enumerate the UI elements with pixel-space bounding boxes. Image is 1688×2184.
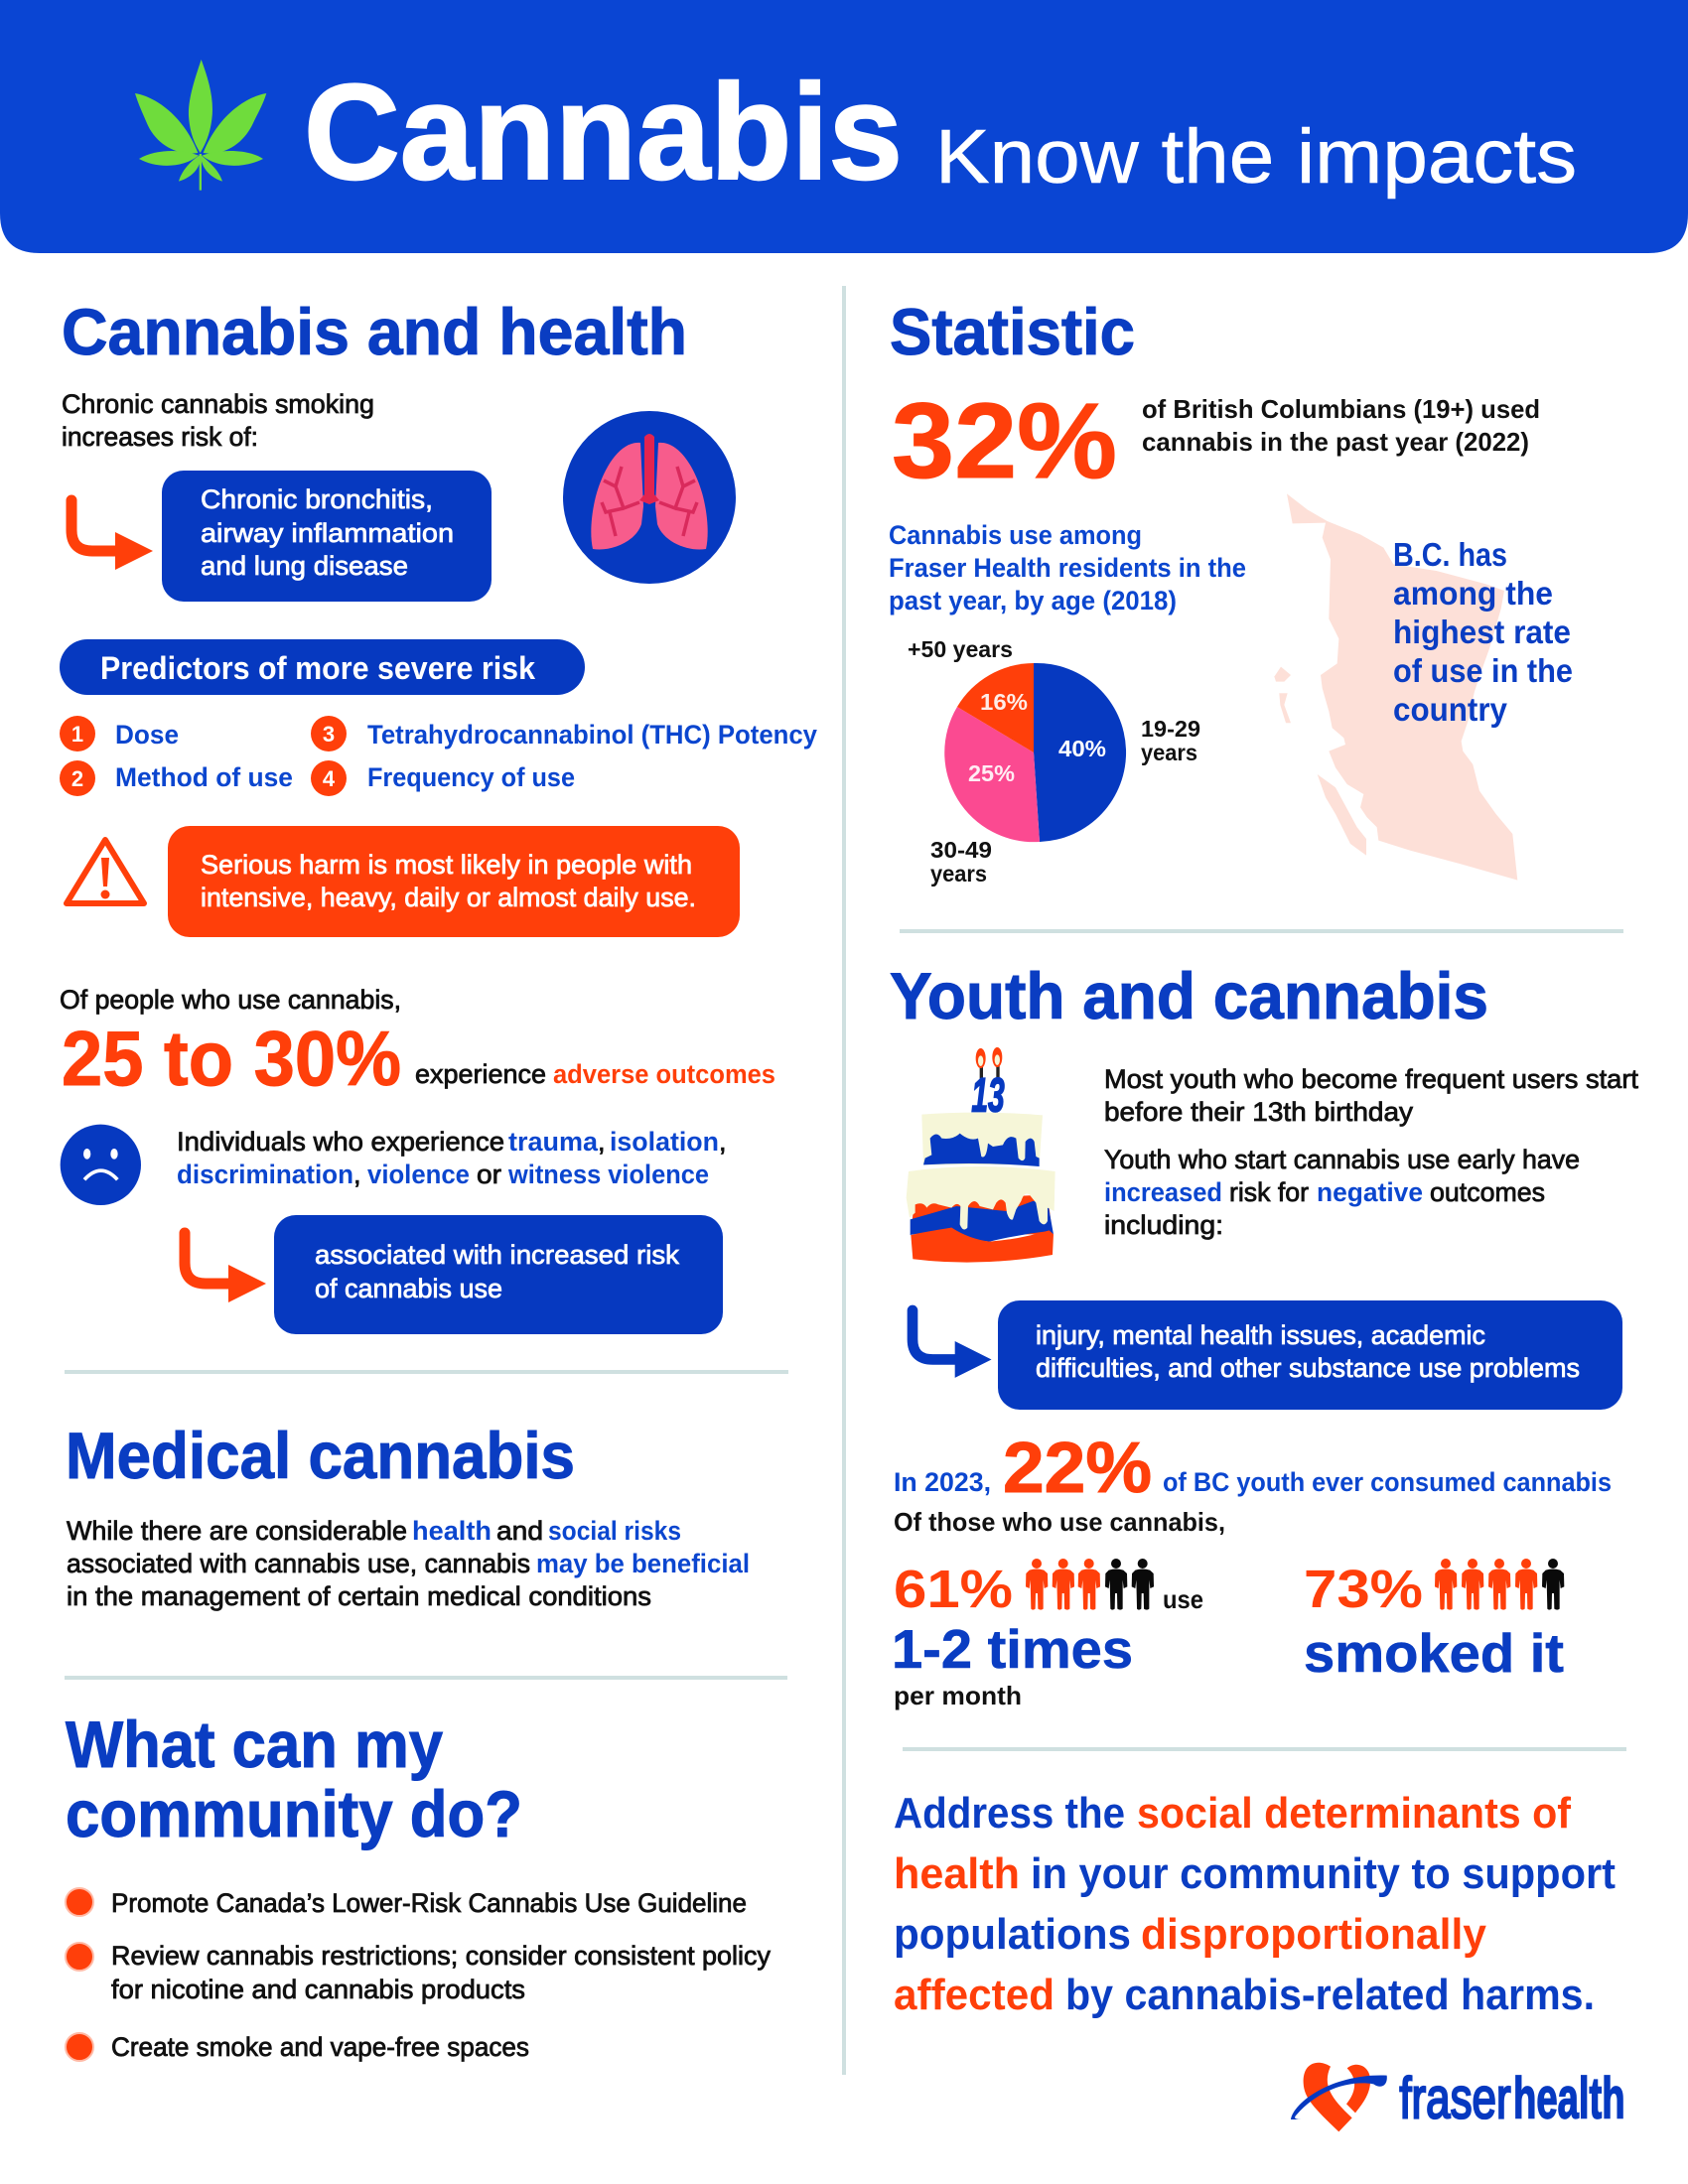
pie chart: use by age: 40% <box>1058 736 1106 761</box>
icon: people 3 of 5 <box>1026 1559 1154 1610</box>
text: medical cannabis body: health <box>412 1516 492 1546</box>
call to action: affected <box>894 1971 1055 2019</box>
text: risk factors: violence <box>367 1160 470 1189</box>
callout: negative outcomes: difficulties, and other substance use problems <box>1036 1353 1580 1383</box>
title: Cannabis <box>304 57 903 208</box>
call to action <box>894 1789 1616 2019</box>
list: predictors: 3 <box>323 722 335 747</box>
text: bc highest rate: highest rate <box>1393 614 1571 650</box>
subtitle: Know the impacts <box>935 114 1577 200</box>
text: youth early use: risk for <box>1229 1177 1309 1207</box>
text: bc highest rate: country <box>1393 691 1508 728</box>
text: british columbians: of British Columbians (19+) used <box>1142 394 1540 424</box>
text: medical cannabis body: and <box>496 1516 543 1546</box>
list: community actions <box>66 1888 771 2062</box>
callout: lung conditions: Chronic bronchitis, <box>201 484 433 514</box>
text: youth early use <box>1104 1064 1638 1240</box>
callout: lung conditions: and lung disease <box>201 551 408 581</box>
call to action: social determinants of <box>1137 1789 1571 1838</box>
pie chart: use by age: +50 years <box>908 636 1013 662</box>
icon: warning triangle <box>67 840 144 903</box>
text: adverse outcomes: experience <box>415 1059 546 1089</box>
text: chronic smoking: increases risk of: <box>62 422 258 452</box>
text: youth early use: Most youth who become frequent users start <box>1104 1064 1638 1094</box>
text: medical cannabis body: in the management of certain medical conditions <box>67 1581 651 1611</box>
heading: what can my community do <box>66 1707 522 1850</box>
call to action: Address the <box>894 1789 1125 1838</box>
list: predictors: Frequency of use <box>367 762 575 792</box>
text: youth early use: before their 13th birthday <box>1104 1097 1414 1127</box>
text: british columbians <box>1142 394 1540 457</box>
pill: predictors heading <box>60 639 585 695</box>
text: bc highest rate <box>1393 536 1573 728</box>
text: fraser health use <box>889 520 1246 615</box>
callout: lung conditions: airway inflammation <box>201 518 454 548</box>
stat: 61 percent: per month <box>894 1681 1022 1710</box>
list: community actions: Create smoke and vape-free spaces <box>111 2032 529 2062</box>
call to action: disproportionally <box>1141 1910 1487 1959</box>
stat: 61 percent <box>892 1559 1203 1710</box>
text: youth early use: outcomes <box>1430 1177 1545 1207</box>
text: risk factors: or <box>477 1160 501 1189</box>
panel: statistic <box>889 295 1573 887</box>
arrow: orange <box>71 500 153 570</box>
text: british columbians: cannabis in the past year (2022) <box>1142 427 1529 457</box>
header banner <box>0 0 1688 253</box>
stat: 22 percent of youth <box>894 1429 1612 1508</box>
panel: what can my community do <box>66 1707 771 2062</box>
text: bc highest rate: B.C. has <box>1393 536 1507 573</box>
text: risk factors: isolation <box>610 1127 719 1157</box>
call to action: populations <box>894 1910 1131 1959</box>
text: risk factors: , <box>598 1127 606 1157</box>
icon: sad face <box>61 1125 141 1205</box>
callout: serious harm <box>168 826 740 937</box>
list: predictors: Tetrahydrocannabinol (THC) Potency <box>367 720 817 750</box>
text: youth early use: Youth who start cannabis use early have <box>1104 1145 1580 1174</box>
heading: what can my community do: What can my <box>66 1707 443 1781</box>
stat: 22 percent of youth: 22% <box>1003 1429 1152 1508</box>
list: community actions: Promote Canada’s Lower-Risk Cannabis Use Guideline <box>111 1888 747 1918</box>
text: medical cannabis body: While there are considerable <box>67 1516 407 1546</box>
text: bc highest rate: among the <box>1393 575 1553 612</box>
list: predictors: 4 <box>323 766 336 791</box>
text: chronic smoking <box>62 389 374 452</box>
heading: what can my community do: community do? <box>66 1777 522 1850</box>
text: youth early use: increased <box>1104 1177 1222 1207</box>
text: risk factors <box>177 1127 727 1189</box>
text: risk factors: trauma <box>508 1127 599 1157</box>
text: risk factors: , <box>719 1127 727 1157</box>
text: youth early use: including: <box>1104 1210 1223 1240</box>
stat: 32 percent: 32% <box>892 380 1117 500</box>
text: medical cannabis body: may be beneficial <box>536 1549 750 1578</box>
list: predictors: Method of use <box>115 762 293 792</box>
text: youth early use: negative <box>1317 1177 1423 1207</box>
text: risk factors: witness violence <box>507 1160 709 1189</box>
heading: cannabis and health: Cannabis and health <box>62 295 687 368</box>
pie chart: use by age: 16% <box>980 689 1028 715</box>
list: predictors: Dose <box>115 720 179 750</box>
pie chart: use by age: 19-29 <box>1141 716 1200 742</box>
heading: medical cannabis: Medical cannabis <box>66 1419 575 1492</box>
callout: serious harm: Serious harm is most likely in people with <box>201 850 692 880</box>
map: british columbia <box>1274 493 1517 881</box>
logo: fraser health <box>1291 2063 1625 2131</box>
logo: fraser health: health <box>1513 2066 1625 2130</box>
pie chart: use by age: years <box>1141 740 1197 765</box>
callout: serious harm: intensive, heavy, daily or almost daily use. <box>201 883 696 912</box>
text: medical cannabis body: associated with cannabis use, cannabis <box>67 1549 530 1578</box>
text: adverse outcomes <box>415 1059 775 1089</box>
stat: 22 percent of youth: of BC youth ever consumed cannabis <box>1163 1467 1612 1497</box>
pie chart: use by age: 30-49 <box>930 837 992 863</box>
center column divider <box>842 286 846 2075</box>
text: medical cannabis body: social risks <box>548 1516 681 1546</box>
stat: 61 percent: 1-2 times <box>892 1618 1133 1680</box>
panel: youth and cannabis <box>890 959 1638 1710</box>
text: chronic smoking: Chronic cannabis smoking <box>62 389 374 419</box>
heading: youth and cannabis: Youth and cannabis <box>890 959 1488 1032</box>
icon: lungs <box>563 411 736 584</box>
logo: fraser health: fraser <box>1399 2066 1511 2130</box>
text: bc highest rate: of use in the <box>1393 652 1573 689</box>
arrow: orange <box>185 1233 266 1302</box>
text: risk factors: Individuals who experience <box>177 1127 504 1157</box>
pie chart: use by age: years <box>930 861 987 887</box>
list: community actions: Review cannabis restrictions; consider consistent policy <box>111 1941 771 1971</box>
list: predictors <box>60 716 817 796</box>
heading: statistic: Statistic <box>890 295 1135 368</box>
call to action: by cannabis-related harms. <box>1065 1971 1595 2019</box>
text: of people who use cannabis: Of people who use cannabis, <box>60 985 401 1015</box>
list: predictors: 2 <box>71 766 83 791</box>
icon: birthday cake: 13 <box>971 1068 1005 1122</box>
callout: negative outcomes: injury, mental health issues, academic <box>1036 1320 1485 1350</box>
stat: 73 percent: smoked it <box>1304 1622 1564 1684</box>
text: risk factors: , <box>353 1160 361 1189</box>
call to action: health <box>894 1849 1020 1898</box>
panel: medical cannabis <box>66 1419 750 1611</box>
list: community actions: for nicotine and cannabis products <box>111 1975 525 2004</box>
callout: increased risk: associated with increased risk <box>315 1240 679 1270</box>
stat: 22 percent of youth: In 2023, <box>894 1467 991 1497</box>
stat: 61 percent: use <box>1163 1584 1203 1614</box>
text: fraser health use: Cannabis use among <box>889 520 1142 550</box>
call to action: in your community to support <box>1031 1849 1616 1898</box>
stat: 61 percent: 61% <box>894 1560 1013 1619</box>
stat: 25 to 30 percent: 25 to 30% <box>62 1015 401 1102</box>
callout: increased risk: of cannabis use <box>315 1274 502 1303</box>
icon: people 4 of 5 <box>1435 1559 1564 1610</box>
text: medical cannabis body <box>67 1516 750 1611</box>
stat: 73 percent <box>1304 1559 1564 1684</box>
pie chart: use by age <box>908 636 1200 887</box>
callout: increased risk <box>274 1215 723 1334</box>
icon: birthday cake <box>907 1047 1055 1263</box>
pill: predictors heading: Predictors of more severe risk <box>100 650 535 686</box>
arrow: blue <box>913 1310 992 1378</box>
list: predictors: 1 <box>71 722 83 747</box>
icon: cannabis leaf <box>135 60 266 191</box>
pie chart: use by age: 25% <box>968 760 1015 786</box>
panel: cannabis and health <box>60 295 817 1334</box>
text: risk factors: discrimination <box>177 1160 353 1189</box>
stat: 73 percent: 73% <box>1304 1560 1423 1619</box>
text: of those who use: Of those who use cannabis, <box>894 1507 1225 1537</box>
text: adverse outcomes: adverse outcomes <box>553 1059 775 1089</box>
text: fraser health use: Fraser Health residents in the <box>889 553 1246 583</box>
callout: lung conditions <box>162 471 492 602</box>
callout: negative outcomes <box>998 1300 1622 1410</box>
text: fraser health use: past year, by age (2018) <box>889 586 1177 615</box>
